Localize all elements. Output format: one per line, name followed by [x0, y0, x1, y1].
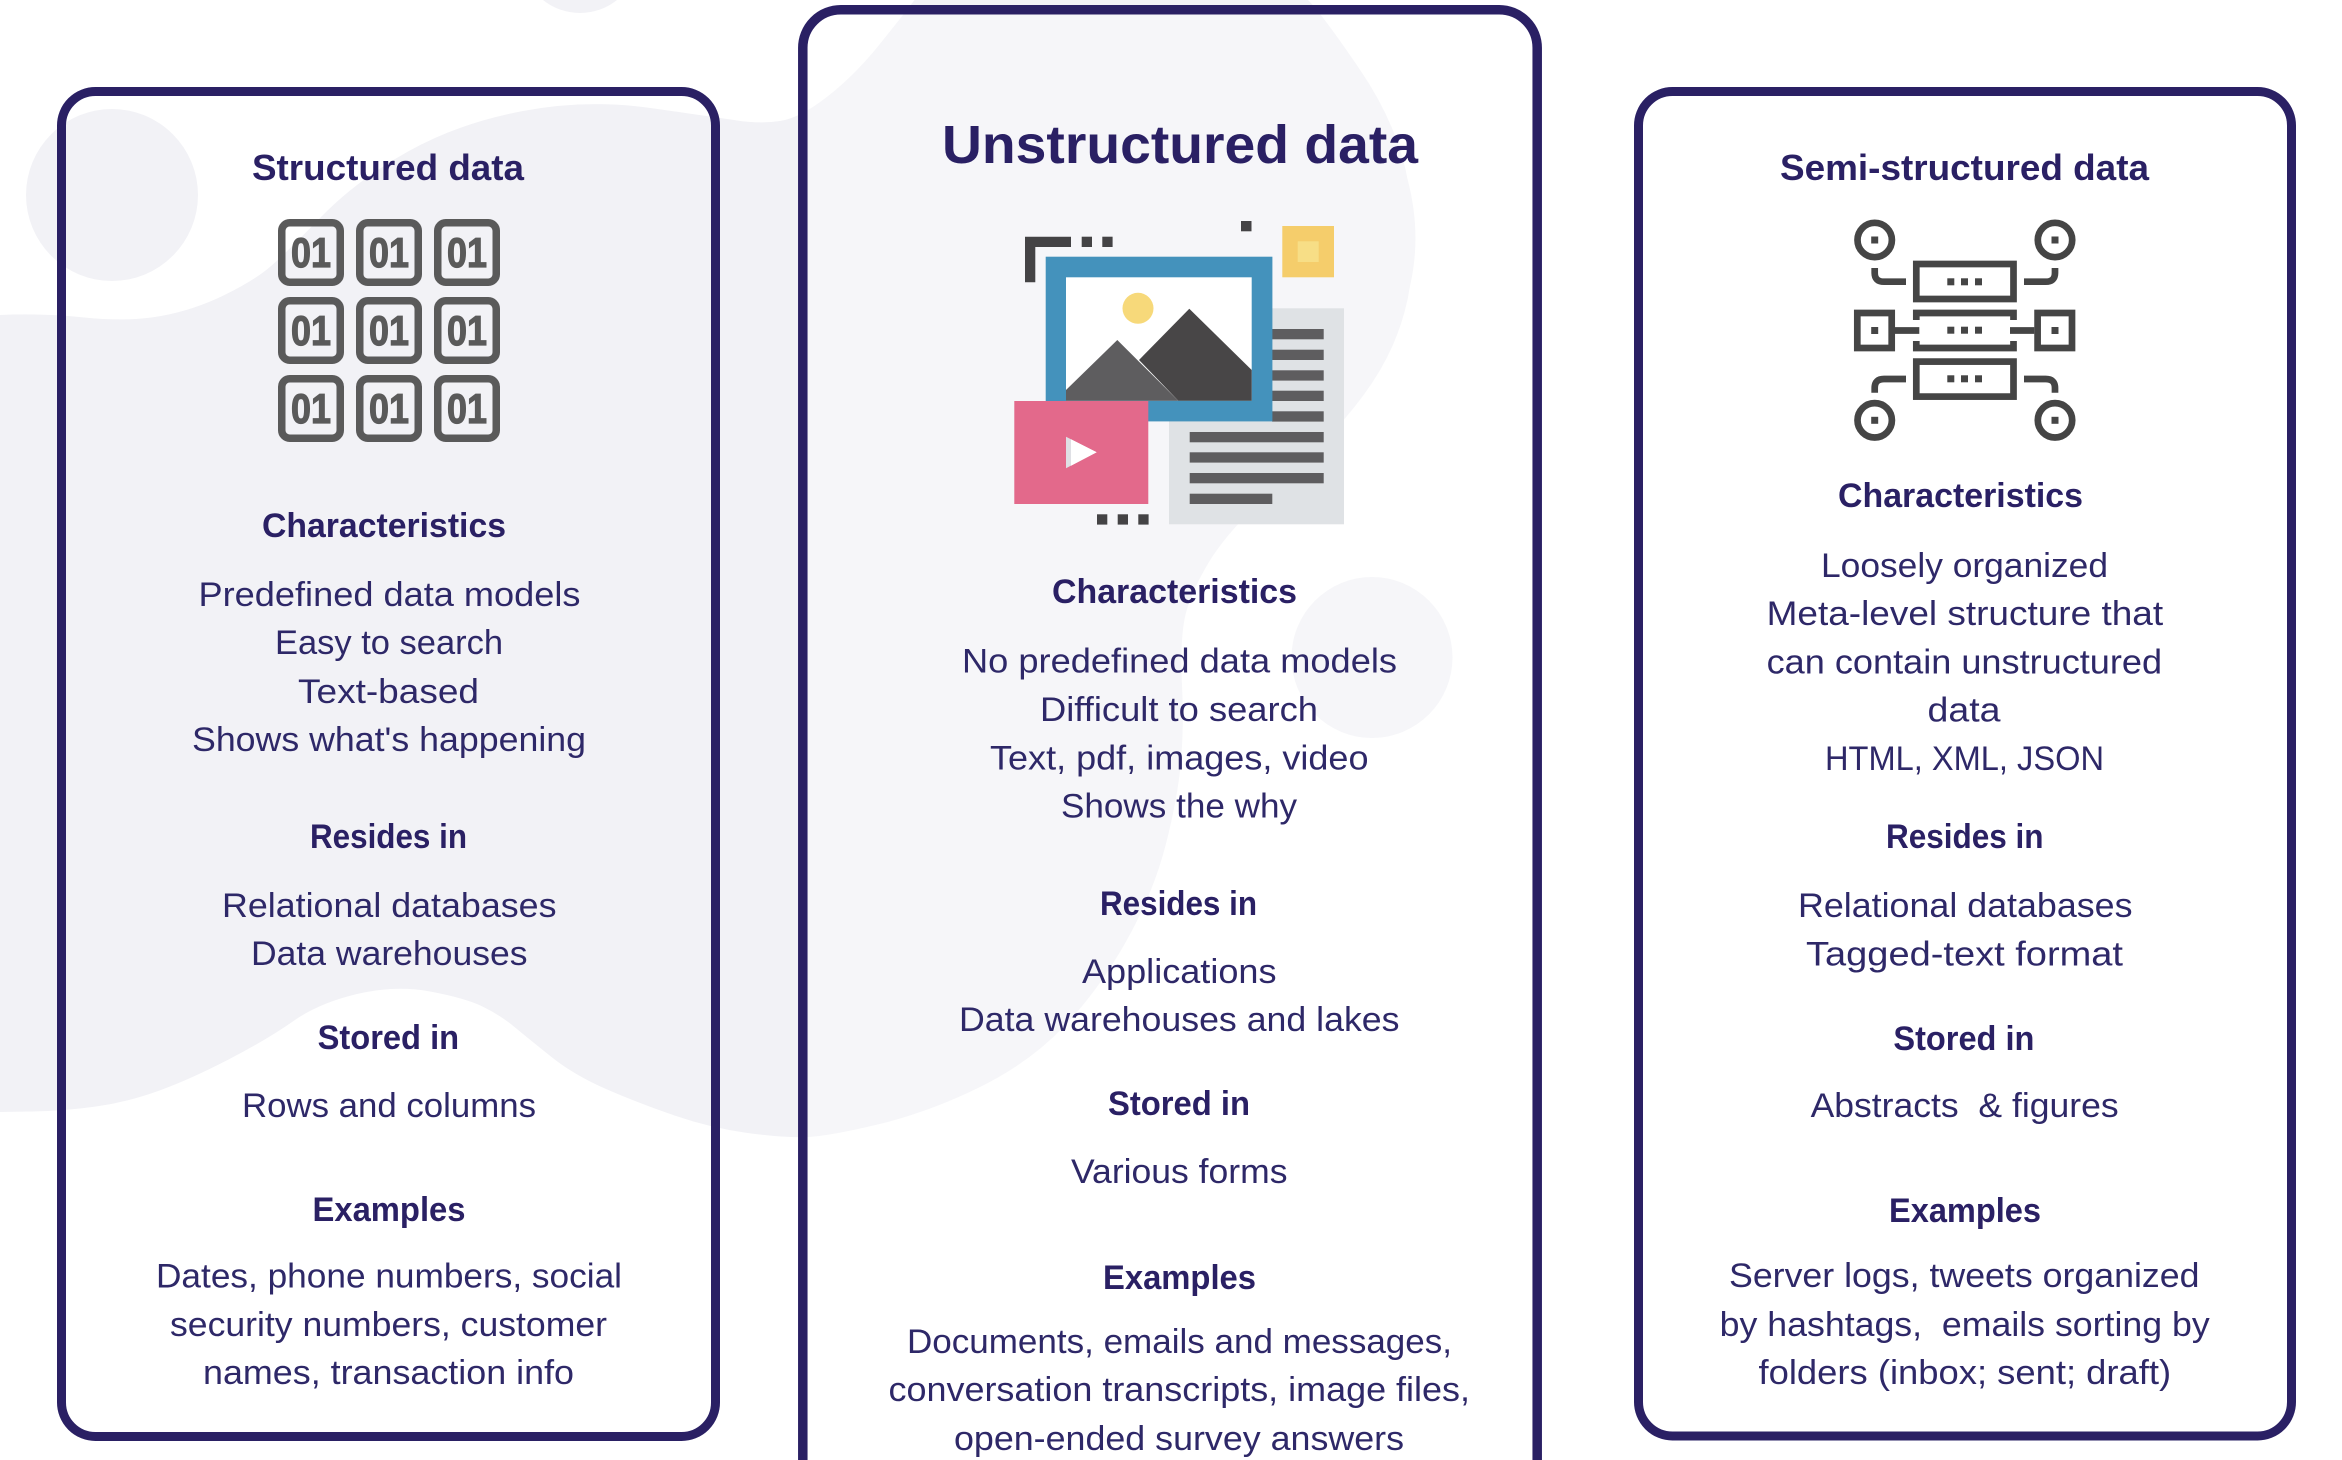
section: examples: conversation transcripts, image files,	[888, 1371, 1470, 1409]
section: examples: Server logs, tweets organized	[1729, 1257, 2200, 1295]
section: stored in	[1811, 1020, 2119, 1125]
section: stored in: Various forms	[1071, 1153, 1288, 1191]
section: examples: Examples	[312, 1191, 466, 1229]
section: stored in	[242, 1019, 536, 1125]
section: resides in	[959, 885, 1400, 1039]
section: examples: Examples	[1889, 1192, 2041, 1230]
section: characteristics: Loosely organized	[1821, 547, 2108, 585]
section: characteristics: can contain unstructured	[1767, 644, 2162, 682]
section: examples: Examples	[1103, 1259, 1256, 1297]
section: examples: Documents, emails and messages,	[907, 1323, 1452, 1361]
section: characteristics: Characteristics	[1838, 477, 2083, 515]
icon: binary grid: 01	[447, 229, 487, 276]
section: stored in: Rows and columns	[242, 1087, 536, 1125]
section: characteristics: HTML, XML, JSON	[1825, 740, 2104, 778]
background blobs	[0, 0, 1452, 1137]
section: characteristics: Predefined data models	[198, 576, 580, 614]
section: examples: Dates, phone numbers, social	[156, 1258, 622, 1296]
heading: structured data: Structured data	[252, 147, 525, 188]
section: resides in	[222, 818, 556, 973]
section: resides in	[1798, 818, 2132, 974]
section: stored in: Stored in	[318, 1019, 459, 1057]
section: characteristics: Text-based	[298, 673, 479, 711]
section: characteristics: Easy to search	[275, 624, 503, 662]
icon: binary grid: 01	[447, 385, 487, 432]
section: resides in: Relational databases	[1798, 887, 2132, 925]
section: resides in: Data warehouses and lakes	[959, 1001, 1400, 1039]
section: examples: open-ended survey answers	[954, 1420, 1404, 1458]
section: characteristics: Shows the why	[1061, 788, 1297, 826]
section: examples: security numbers, customer	[170, 1306, 607, 1344]
heading: semi-structured data: Semi-structured data	[1780, 147, 2150, 188]
section: resides in: Resides in	[1886, 818, 2044, 856]
panel: structured data	[62, 92, 716, 1436]
section: stored in	[1071, 1085, 1288, 1191]
icon: network of nodes	[1857, 223, 2072, 437]
section: characteristics	[962, 573, 1397, 826]
section: examples	[156, 1191, 622, 1392]
section: characteristics: Text, pdf, images, video	[990, 740, 1368, 778]
section: examples: names, transaction info	[203, 1354, 574, 1392]
section: stored in: Stored in	[1893, 1020, 2034, 1058]
section: characteristics: Difficult to search	[1040, 691, 1318, 729]
section: characteristics: Shows what's happening	[192, 721, 586, 759]
section: characteristics: Characteristics	[262, 507, 506, 545]
section: resides in: Relational databases	[222, 887, 556, 925]
section: stored in: Abstracts & figures	[1811, 1087, 2119, 1125]
icon: binary grid: 01	[291, 307, 331, 354]
section: resides in: Applications	[1082, 953, 1276, 991]
section: stored in: Stored in	[1108, 1085, 1250, 1123]
section: resides in: Resides in	[1100, 885, 1257, 923]
section: resides in: Resides in	[310, 818, 467, 856]
heading: unstructured data: Unstructured data	[942, 115, 1419, 175]
section: examples	[888, 1259, 1470, 1458]
icon: binary grid	[282, 223, 496, 438]
section: characteristics: Meta-level structure that	[1767, 595, 2164, 633]
panel: unstructured data	[803, 10, 1537, 1460]
icon: binary grid: 01	[291, 229, 331, 276]
icon: binary grid: 01	[369, 385, 409, 432]
icon: media collage	[1014, 221, 1344, 525]
section: examples: folders (inbox; sent; draft)	[1758, 1354, 2171, 1392]
section: examples: by hashtags, emails sorting by	[1720, 1306, 2210, 1344]
section: characteristics: data	[1928, 692, 2001, 730]
icon: binary grid: 01	[291, 385, 331, 432]
icon: binary grid: 01	[369, 229, 409, 276]
icon: binary grid: 01	[447, 307, 487, 354]
panel: semi-structured data	[1638, 92, 2292, 1436]
section: characteristics	[1767, 477, 2164, 778]
section: resides in: Data warehouses	[251, 935, 528, 973]
section: resides in: Tagged-text format	[1806, 936, 2124, 974]
section: examples	[1720, 1192, 2210, 1392]
section: characteristics: Characteristics	[1052, 573, 1297, 611]
icon: binary grid: 01	[369, 307, 409, 354]
section: characteristics	[192, 507, 586, 759]
section: characteristics: No predefined data models	[962, 642, 1397, 680]
